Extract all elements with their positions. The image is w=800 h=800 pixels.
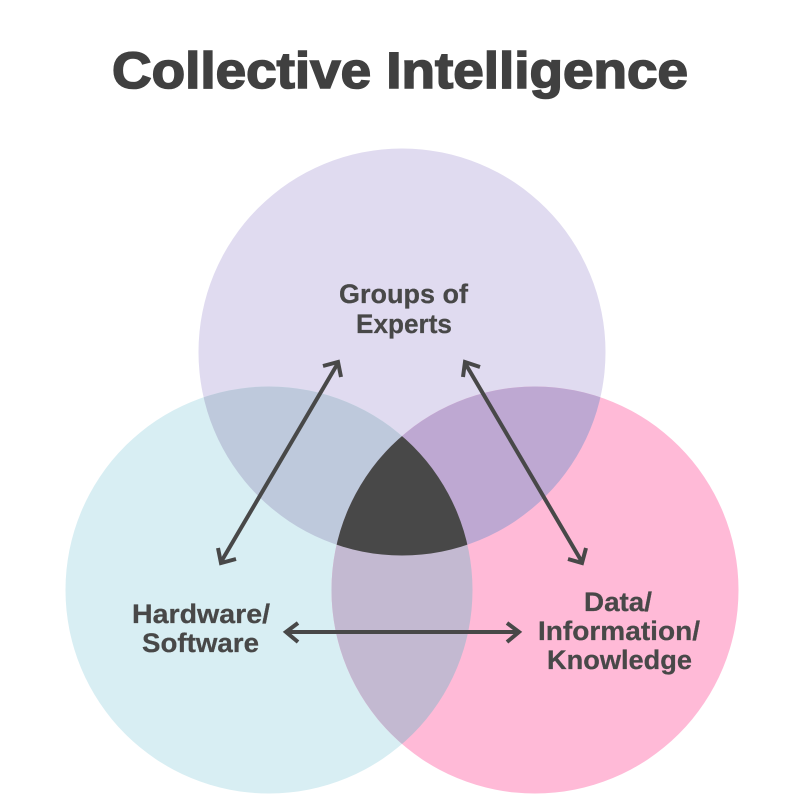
title: Collective Intelligence	[112, 42, 688, 99]
label: data/information/knowledge: Data/	[584, 587, 653, 617]
label: groups of experts: Experts	[356, 309, 452, 339]
center overlap	[336, 436, 468, 556]
circle: groups of experts	[198, 148, 606, 556]
label: data/information/knowledge	[538, 587, 701, 675]
arrow: experts to hardware	[218, 362, 341, 563]
circle: data/information/knowledge	[332, 386, 738, 794]
arrow: experts to data	[463, 362, 586, 563]
circle: hardware/software	[66, 386, 472, 794]
label: data/information/knowledge: Information/	[538, 616, 701, 646]
overlap: experts and data	[402, 386, 600, 544]
label: groups of experts: Groups of	[339, 279, 469, 309]
overlap: experts and hardware	[204, 386, 402, 544]
label: hardware/software	[132, 599, 271, 658]
arrow: hardware to data	[286, 623, 519, 642]
label: data/information/knowledge: Knowledge	[547, 645, 692, 675]
label: hardware/software: Software	[142, 628, 259, 658]
overlap: hardware and data	[332, 544, 472, 744]
label: groups of experts	[339, 279, 469, 339]
venn diagram	[66, 148, 738, 794]
label: hardware/software: Hardware/	[132, 599, 271, 629]
